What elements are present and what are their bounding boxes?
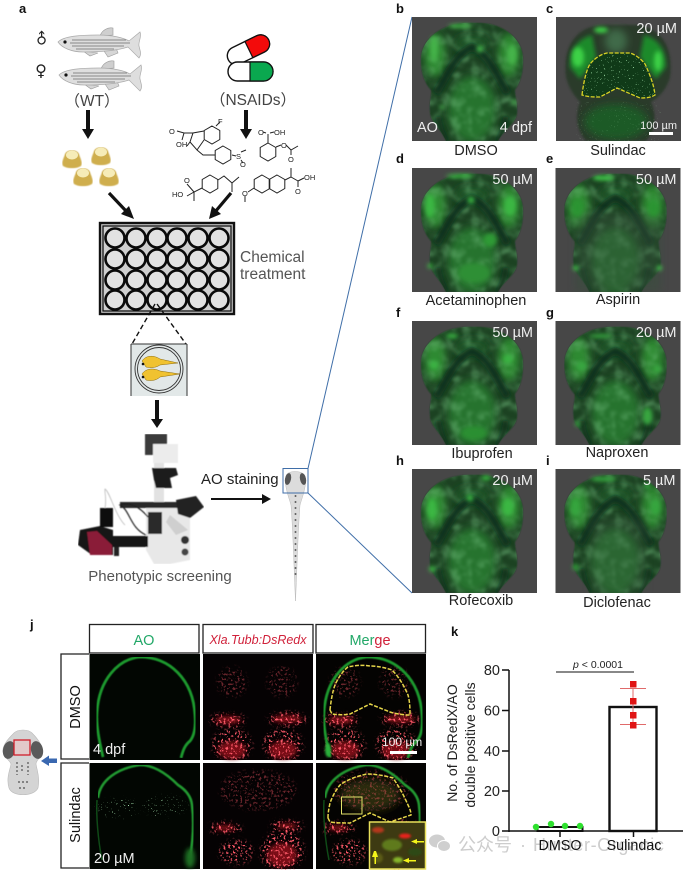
label chemical treatment: treatment — [240, 266, 306, 283]
data points: DMSO — [533, 821, 583, 830]
watermark: 公众号 — [458, 835, 512, 855]
panel: i Diclofenac: Diclofenac — [583, 595, 651, 611]
x axis labels: Sulindac — [607, 838, 661, 854]
image: merge Sulindac — [316, 763, 426, 870]
image: DsRedx Sulindac — [203, 763, 313, 870]
chemical structure: sulindac: F — [218, 117, 223, 126]
y axis values: 0 — [492, 824, 500, 840]
panel: e Aspirin: Aspirin — [596, 292, 640, 308]
header AO — [90, 624, 199, 653]
side label Sulindac: Sulindac — [68, 787, 84, 843]
arrow: AO staining — [211, 494, 271, 504]
arrow: NSAIDs to compounds — [240, 110, 252, 139]
header Merge: Merge — [349, 633, 391, 649]
panel: f Ibuprofen: Ibuprofen — [451, 446, 513, 462]
error bar and points: Sulindac — [620, 681, 646, 728]
icon: male zebrafish — [58, 28, 141, 58]
panel: j imaging grid — [1, 617, 426, 870]
panel: g Naproxen: Naproxen — [586, 445, 648, 461]
yellow dashed outline: hindbrain region — [582, 53, 655, 98]
chemical structure: naproxen — [242, 168, 315, 202]
panel: d Acetaminophen: 50 µM — [492, 172, 533, 188]
watermark: · — [520, 835, 526, 855]
panel: b DMSO — [396, 1, 538, 159]
y axis values: 40 — [484, 744, 500, 760]
small yellow selection box — [342, 797, 362, 814]
significance bar — [556, 659, 634, 672]
arrow: blue pointer — [41, 756, 57, 766]
panel: c Sulindac: Sulindac — [590, 143, 646, 159]
side label Sulindac — [61, 763, 89, 868]
bar: DMSO — [538, 827, 582, 831]
panel: b DMSO: DMSO — [454, 143, 498, 159]
header Xla.Tubb:DsRedx — [203, 624, 313, 653]
zoom line to top panel — [308, 17, 412, 468]
highlight box on larva head — [283, 468, 308, 493]
panel: f Ibuprofen: 50 µM — [492, 325, 533, 341]
panel: a screening workflow — [19, 1, 315, 601]
header Merge — [316, 624, 426, 653]
icon: larval head diagram — [1, 730, 45, 795]
label chemical treatment: Chemical — [240, 249, 305, 266]
panel: d Acetaminophen: Acetaminophen — [426, 293, 526, 309]
arrow: inset to microscope — [151, 400, 163, 428]
panel: i Diclofenac — [546, 453, 682, 611]
y axis values: 60 — [484, 704, 500, 720]
watermark — [429, 834, 664, 855]
header AO: AO — [134, 633, 154, 649]
x axis labels: DMSO — [539, 838, 581, 854]
panel: e Aspirin: 50 µM — [636, 172, 676, 188]
panel: c Sulindac: 100 µm — [640, 120, 677, 132]
panel letter k: k — [451, 624, 459, 639]
image: AO Sulindac: 20 µM — [94, 851, 135, 867]
inset: magnified merge view — [370, 822, 426, 869]
label AO staining: AO staining — [201, 471, 279, 488]
chemical structure: sulindac: O — [169, 127, 175, 136]
panel: h Rofecoxib: h — [396, 453, 404, 468]
image: AO Sulindac — [90, 763, 200, 869]
panel: b DMSO: AO — [417, 120, 438, 136]
panel: h Rofecoxib: Rofecoxib — [449, 593, 513, 609]
panel: k bar chart — [444, 624, 683, 854]
arrow: embryos to plate — [109, 193, 134, 219]
chemical structure: ibuprofen: O — [184, 176, 190, 185]
panel: h Rofecoxib: 20 µM — [492, 473, 533, 489]
panel: e Aspirin: e — [546, 151, 553, 166]
chemical structure: ibuprofen — [172, 175, 239, 201]
chemical structure: naproxen: O — [242, 189, 248, 198]
chemical structure: naproxen: OH — [304, 173, 315, 182]
image: merge DMSO: 100 µm — [382, 735, 422, 749]
chemical structure: naproxen: O — [295, 187, 301, 196]
y axis values — [484, 663, 500, 840]
icon: female zebrafish — [59, 61, 142, 91]
icon: stained larva — [284, 472, 307, 601]
icon: embryos — [62, 147, 119, 186]
chemical structure: sulindac: S — [236, 152, 241, 161]
y axis values: 20 — [484, 784, 500, 800]
chemical structure: aspirin — [258, 128, 298, 164]
panel: c Sulindac: c — [546, 1, 553, 16]
x axis labels — [539, 838, 661, 854]
chemical structure: sulindac: O — [240, 160, 246, 169]
panel: g Naproxen: g — [546, 305, 554, 320]
panel: e Aspirin — [546, 151, 682, 308]
chemical structure: sulindac: OH — [176, 140, 187, 149]
panel: h Rofecoxib — [396, 453, 538, 609]
panel: d Acetaminophen: d — [396, 151, 404, 166]
axes and ticks — [502, 670, 683, 837]
side label DMSO: DMSO — [68, 685, 84, 729]
watermark: Hunter-Organic — [533, 835, 664, 855]
icon: capsules — [224, 32, 273, 81]
y axis title line 2: double positive cells — [462, 682, 478, 808]
chemical structure: sulindac — [169, 117, 246, 169]
bar: Sulindac — [610, 707, 656, 831]
panel: f Ibuprofen: f — [396, 305, 401, 320]
image: DsRedx DMSO — [203, 654, 313, 760]
side label DMSO — [61, 654, 89, 759]
panel: d Acetaminophen — [396, 151, 538, 309]
icon: microscope — [78, 434, 204, 564]
icon: male symbol: ♂ — [31, 28, 53, 50]
y axis values: 80 — [484, 663, 500, 679]
chemical structure: aspirin: O — [281, 141, 287, 150]
panel: c Sulindac: 20 µM — [636, 21, 677, 37]
panel: b DMSO: b — [396, 1, 404, 16]
image: merge DMSO — [316, 654, 426, 760]
image: AO DMSO — [90, 654, 200, 760]
chart: 24-well plate — [100, 223, 234, 314]
label phenotypic screening: Phenotypic screening — [88, 568, 232, 585]
arrow: WT to embryos — [82, 110, 94, 139]
panel: b DMSO: 4 dpf — [500, 120, 533, 136]
panel: f Ibuprofen — [396, 305, 538, 462]
significance bar: p < 0.0001 — [572, 659, 623, 671]
panel: g Naproxen — [546, 305, 682, 461]
image: AO DMSO: 4 dpf — [93, 742, 126, 758]
header Xla.Tubb:DsRedx: Xla.Tubb:DsRedx — [208, 633, 307, 647]
y axis title: No. of DsRedX/AO — [444, 684, 460, 802]
chemical structure: aspirin: O — [258, 128, 264, 137]
panel letter j: j — [29, 617, 34, 632]
chemical structure: ibuprofen: HO — [172, 190, 183, 199]
panel letter a: a — [19, 1, 27, 16]
icon: female symbol: ♀ — [35, 61, 47, 80]
arrow: compounds to plate — [209, 193, 231, 219]
panel: g Naproxen: 20 µM — [636, 325, 676, 341]
label NSAIDs: （NSAIDs） — [210, 92, 296, 109]
panel: i Diclofenac: i — [546, 453, 550, 468]
panel: c Sulindac — [546, 1, 681, 159]
chemical structure: aspirin: OH — [274, 128, 285, 137]
zoom line to bottom panel — [308, 493, 412, 593]
panel: i Diclofenac: 5 µM — [643, 473, 676, 489]
label WT: （WT） — [64, 93, 120, 110]
icon: well inset with larvae — [131, 344, 187, 396]
chemical structure: aspirin: O — [288, 155, 294, 164]
zoom lines from well to inset — [132, 304, 186, 344]
